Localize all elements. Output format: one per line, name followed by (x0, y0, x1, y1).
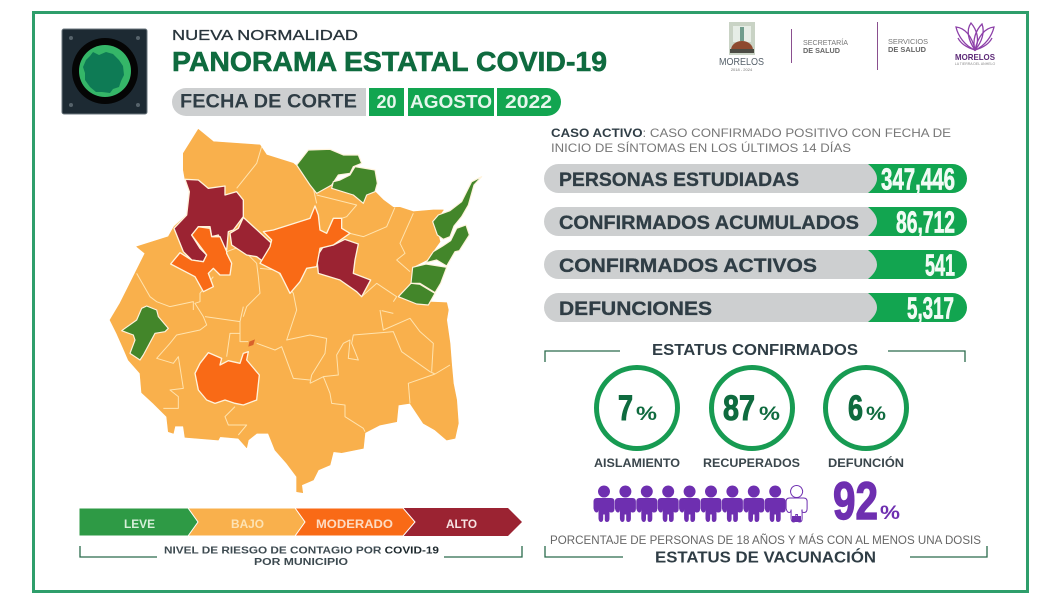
donut: defuncion: 6 (848, 389, 863, 428)
donut: recuperados: % (759, 404, 780, 425)
logos (719, 22, 996, 72)
legend: risk levels: ALTO (446, 517, 477, 531)
stat: confirmados activos (544, 248, 967, 282)
stat: personas estudiadas (544, 162, 967, 196)
logos: LA TIERRA DEL ANHELO (955, 62, 996, 66)
logos: DE SALUD (803, 46, 841, 55)
icon: vaccination people row (594, 486, 807, 522)
legend caption: NIVEL DE RIESGO DE CONTAGIO POR COVID-19 (164, 544, 439, 556)
legend: risk levels: LEVE (124, 517, 155, 531)
icon: state shield (729, 22, 755, 55)
moderate risk municipalities (171, 206, 350, 405)
active case definition: CASO ACTIVO : CASO CONFIRMADO POSITIVO CON FECHA DE (551, 126, 951, 140)
legend: risk levels (79, 508, 522, 536)
stat: confirmados acumulados (544, 204, 967, 240)
logos: 2018 - 2024 (731, 67, 753, 72)
legend: risk levels: MODERADO (316, 517, 393, 531)
logos: SERVICIOS (888, 37, 928, 46)
active case definition: INICIO DE SÍNTOMAS EN LOS ÚLTIMOS 14 DÍAS (551, 140, 851, 155)
logos: SECRETARÍA (803, 38, 848, 47)
stat: personas estudiadas: 347,446 (881, 162, 955, 196)
base low risk silhouette (110, 129, 458, 493)
date bar: 2022 (505, 92, 552, 112)
date bar (172, 88, 561, 116)
active case definition (551, 126, 951, 155)
legend caption (80, 544, 522, 568)
municipal boundaries (137, 147, 450, 435)
title: PANORAMA ESTATAL COVID-19 (172, 46, 607, 77)
stat: confirmados activos: CONFIRMADOS ACTIVOS (559, 255, 817, 277)
heading: estatus de vacunacion (545, 546, 987, 566)
icon: traffic light (62, 29, 147, 114)
date bar: AGOSTO (410, 92, 492, 112)
subtitle: NUEVA NORMALIDAD (172, 27, 358, 44)
donut: defuncion: % (866, 404, 886, 425)
donut: recuperados: RECUPERADOS (703, 456, 800, 470)
donut: recuperados (703, 368, 800, 470)
heading: estatus confirmados: ESTATUS CONFIRMADOS (652, 342, 858, 359)
heading: estatus confirmados (545, 342, 965, 362)
legend: risk levels: BAJO (231, 517, 264, 531)
donut: aislamiento: AISLAMIENTO (594, 456, 680, 470)
stat: defunciones: 5,317 (907, 290, 954, 326)
stat: confirmados acumulados: 86,712 (896, 204, 955, 240)
icon: Morelos flower (956, 23, 994, 50)
high risk municipalities (174, 179, 371, 297)
stat: confirmados activos: 541 (925, 248, 955, 282)
vaccination caption: PORCENTAJE DE PERSONAS DE 18 AÑOS Y MÁS CON AL MENOS UNA DOSIS (550, 534, 981, 547)
donut: aislamiento (594, 368, 680, 470)
stat: defunciones (544, 290, 967, 326)
stat: confirmados acumulados: CONFIRMADOS ACUMULADOS (559, 212, 859, 234)
stat: personas estudiadas: PERSONAS ESTUDIADAS (559, 169, 799, 191)
logos: MORELOS (719, 57, 764, 68)
vaccination percentage: % (880, 503, 900, 524)
donut: defuncion: DEFUNCIÓN (828, 455, 904, 470)
low risk green municipalities (122, 149, 482, 360)
map of municipalities (110, 129, 482, 493)
donut: defuncion (826, 368, 906, 470)
stat: defunciones: DEFUNCIONES (559, 298, 712, 320)
date bar: FECHA DE CORTE (180, 92, 357, 112)
logos: MORELOS (955, 52, 995, 62)
logos: DE SALUD (888, 45, 927, 54)
heading: estatus de vacunacion: ESTATUS DE VACUNACIÓN (655, 548, 876, 566)
donut: aislamiento: 7 (618, 389, 633, 428)
vaccination percentage: 92 (833, 472, 878, 531)
donut: aislamiento: % (636, 404, 657, 425)
date bar: 20 (376, 92, 397, 112)
legend caption: POR MUNICIPIO (254, 556, 348, 568)
donut: recuperados: 87 (723, 389, 755, 428)
